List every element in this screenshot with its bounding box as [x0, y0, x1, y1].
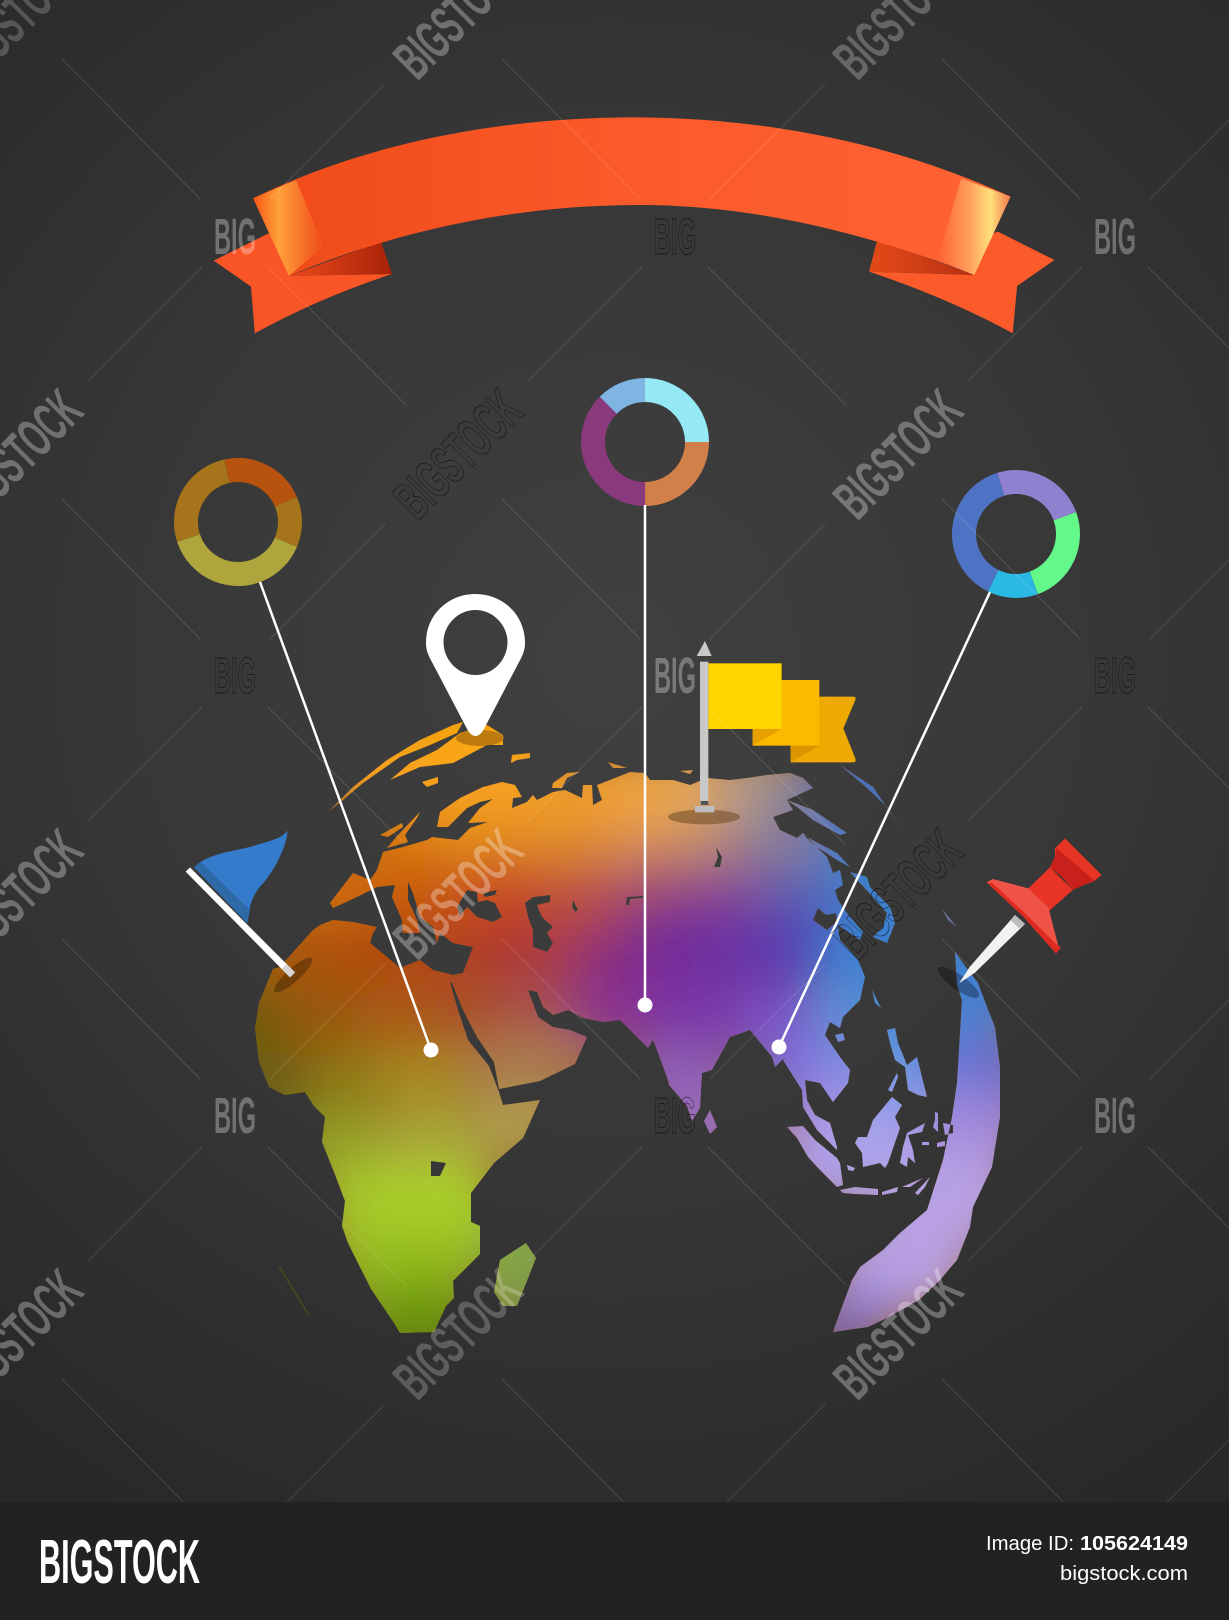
- watermark BIGSTOCK labels: BIGSTOCK: [821, 818, 974, 970]
- footer bar: [0, 1502, 1229, 1620]
- text: BIG: [1094, 1087, 1136, 1144]
- image id number: 105624149: [1080, 1533, 1188, 1555]
- world map with colour gradient: [255, 722, 1000, 1333]
- text: BIG: [1094, 647, 1136, 704]
- connector line right: [772, 592, 990, 1054]
- donut chart centre: [571, 368, 719, 516]
- left ribbon fold: [289, 242, 392, 276]
- watermark BIGSTOCK labels: BIGSTOCK: [821, 1258, 974, 1410]
- right ribbon fold: [869, 240, 974, 275]
- image id label: Image ID:: [986, 1533, 1074, 1555]
- website: bigstock.com: [1060, 1563, 1188, 1585]
- right ribbon highlight: [938, 178, 1011, 275]
- watermark BIG labels: BIG: [214, 1087, 256, 1144]
- donut chart right: [946, 464, 1086, 604]
- watermark BIG labels: BIG: [654, 1087, 696, 1144]
- icon: red push pin: [934, 838, 1102, 1003]
- connector line left: [260, 582, 438, 1058]
- watermark BIGSTOCK labels: BIGSTOCK: [381, 818, 534, 970]
- watermark BIG labels: BIG: [214, 208, 256, 265]
- ribbon banner: [214, 117, 1054, 333]
- watermark BIG labels: BIG: [654, 208, 696, 265]
- watermark BIG labels: BIG: [654, 647, 696, 704]
- icon: blue flag: [186, 831, 316, 997]
- watermark BIG labels: [214, 208, 1136, 1144]
- left ribbon tail: [214, 233, 392, 333]
- connector line centre: [638, 505, 652, 1012]
- footer bar: BIGSTOCK: [39, 1528, 200, 1597]
- left ribbon highlight: [253, 180, 323, 276]
- right ribbon tail: [869, 232, 1054, 333]
- watermark BIGSTOCK labels: BIGSTOCK: [821, 378, 974, 530]
- icon: white location pin: [426, 594, 525, 746]
- watermark BIGSTOCK labels: [0, 0, 974, 1410]
- main ribbon band: [253, 117, 1011, 276]
- watermark BIGSTOCK labels: BIGSTOCK: [381, 378, 534, 530]
- icon: yellow flag: [668, 641, 856, 824]
- donut chart left: [170, 454, 306, 590]
- watermark BIGSTOCK labels: BIGSTOCK: [381, 1258, 534, 1410]
- faint coastline fragment: [279, 1266, 308, 1314]
- text: BIG: [1094, 208, 1136, 265]
- watermark BIG labels: BIG: [214, 647, 256, 704]
